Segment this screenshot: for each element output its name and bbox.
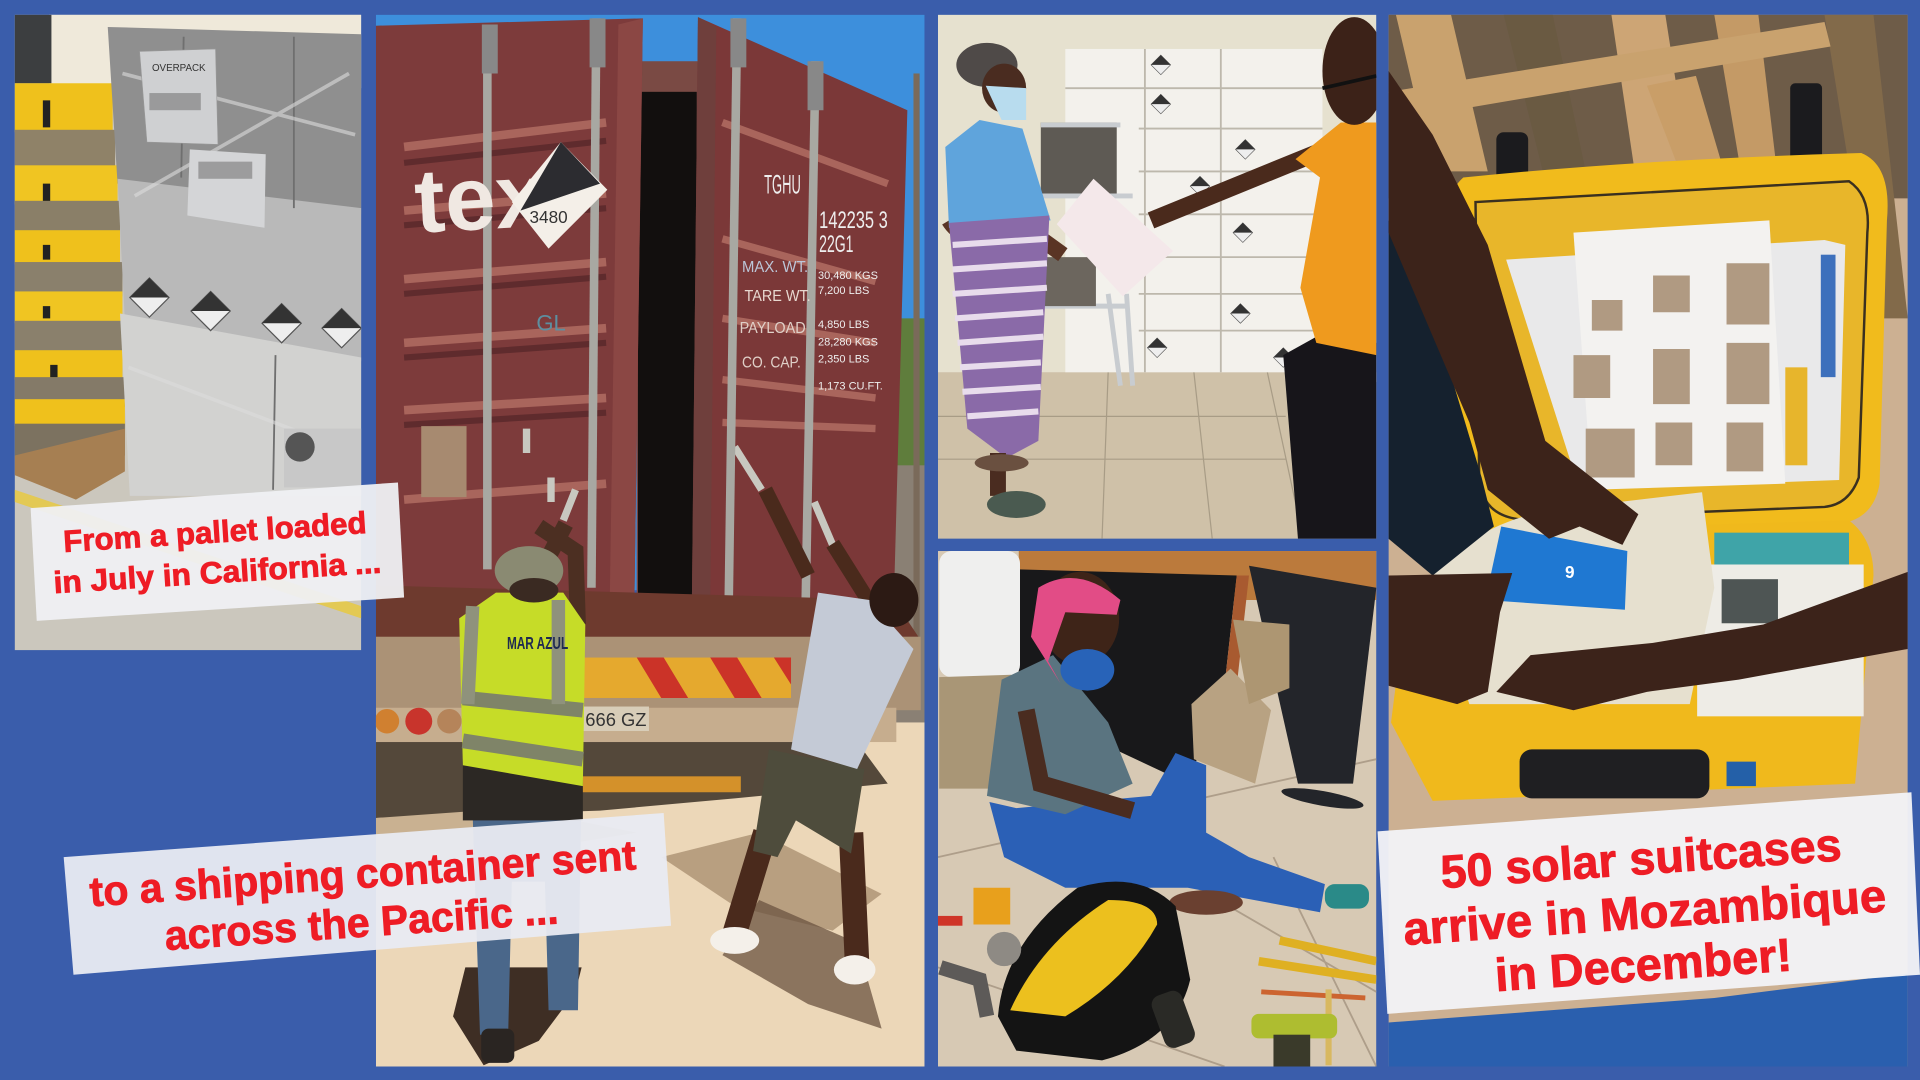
panel: pallet photo xyxy=(15,15,361,650)
caption: solar suitcases: 50 solar suitcases xyxy=(1439,818,1843,898)
container markings: TGHU xyxy=(764,169,801,199)
caption: pallet xyxy=(31,482,404,621)
container markings: 4,850 LBS xyxy=(818,319,869,331)
blue jeans foreground xyxy=(1389,973,1908,1067)
wrapped boxes xyxy=(108,27,361,496)
suitcase base xyxy=(1391,520,1873,801)
dark desk xyxy=(1019,551,1376,813)
cloth bag xyxy=(1433,492,1714,704)
panel: shipping container photo xyxy=(375,15,924,1067)
caption: shipping container: across the Pacific ... xyxy=(163,885,560,959)
hands and arms xyxy=(1389,71,1908,710)
seated woman xyxy=(987,572,1369,915)
container markings: 7,200 LBS xyxy=(818,285,869,297)
container markings: 1,173 CU.FT. xyxy=(818,380,883,392)
caption: shipping container: to a shipping container sent xyxy=(88,831,637,915)
container markings: GL xyxy=(536,311,566,336)
container markings: 142235 3 xyxy=(819,207,888,234)
panel: handing over paperwork photo xyxy=(938,15,1386,539)
cloth bag: 9 xyxy=(1565,562,1575,582)
man in orange shirt xyxy=(1151,17,1386,539)
suitcase lid xyxy=(1442,153,1888,539)
caption: pallet: in July in California ... xyxy=(53,546,382,600)
overpack label: OVERPACK xyxy=(152,63,206,74)
man in white t-shirt xyxy=(710,490,918,1029)
container markings: PAYLOAD xyxy=(740,320,806,337)
container markings: CO. CAP. xyxy=(742,354,801,371)
caption: pallet: From a pallet loaded xyxy=(62,506,367,559)
caption: solar suitcases xyxy=(1378,792,1920,1014)
white sack and boxes xyxy=(939,551,1289,789)
tool bag xyxy=(998,882,1198,1060)
door bars xyxy=(487,18,816,612)
caption: solar suitcases: arrive in Mozambique xyxy=(1402,869,1888,955)
man in hi-vis vest xyxy=(453,524,585,1065)
container markings: 3480 xyxy=(530,207,568,227)
caption: shipping container xyxy=(64,813,671,975)
wooden pallets xyxy=(1389,15,1908,318)
stacked yellow suitcases xyxy=(15,83,125,500)
overpack label xyxy=(140,49,266,228)
container markings: TARE WT. xyxy=(744,288,811,305)
truck bumper: 666 GZ xyxy=(585,709,647,730)
ground xyxy=(376,722,924,1067)
container markings: 30,480 KGS xyxy=(818,270,878,282)
man in hi-vis vest: MAR AZUL xyxy=(507,633,568,653)
scattered tools xyxy=(938,888,1376,1067)
caption: solar suitcases: in December! xyxy=(1493,929,1794,1001)
container markings: 22G1 xyxy=(819,231,853,258)
truck bumper xyxy=(375,585,921,792)
stacked white boxes xyxy=(1065,49,1322,372)
container body xyxy=(376,17,907,606)
ladder xyxy=(1041,122,1133,386)
container markings: 2,350 LBS xyxy=(818,353,869,365)
container markings xyxy=(412,142,888,392)
document xyxy=(1057,179,1173,296)
woman with blue shirt xyxy=(945,43,1063,518)
container markings: 28,280 KGS xyxy=(818,336,878,348)
panel: woman with tools photo xyxy=(938,551,1376,1067)
container markings: tex xyxy=(412,145,548,253)
panel: open solar suitcase photo xyxy=(1389,15,1908,1067)
container markings: MAX. WT. xyxy=(742,259,808,276)
